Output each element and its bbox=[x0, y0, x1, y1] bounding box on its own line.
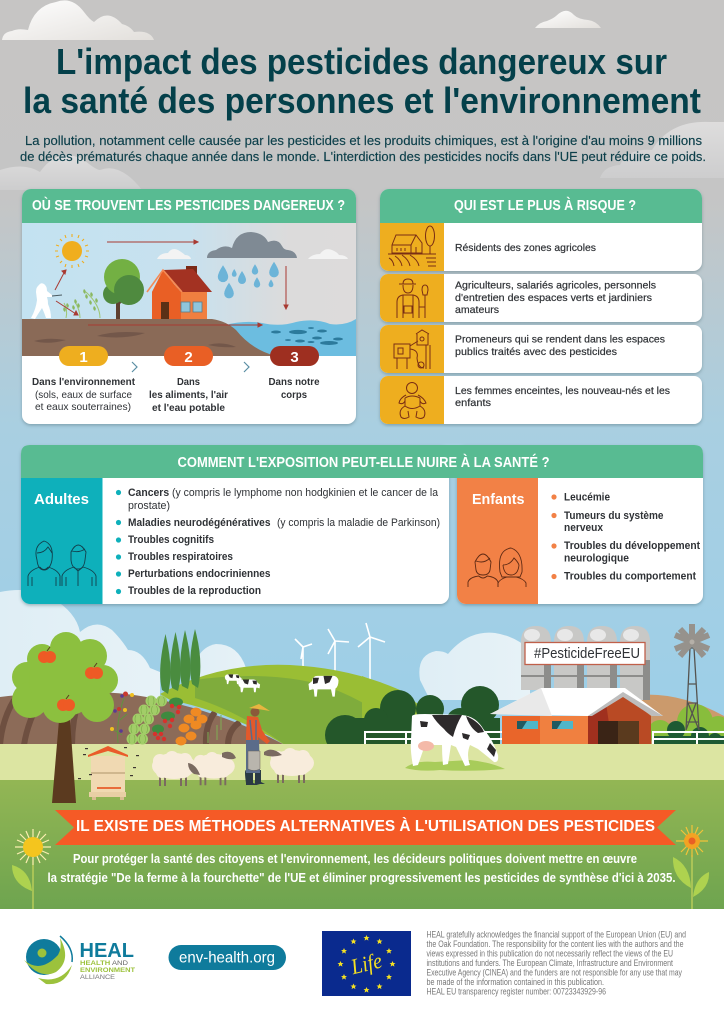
step 3 text: corps bbox=[281, 389, 307, 401]
footer bbox=[0, 909, 724, 1024]
cream band bbox=[0, 744, 724, 780]
children list: Leucémie bbox=[564, 492, 610, 504]
step 2 badge: 2 bbox=[184, 349, 193, 366]
step 2 text: et l'eau potable bbox=[152, 402, 225, 414]
icon: fish bbox=[271, 327, 343, 345]
wind turbines bbox=[295, 623, 385, 680]
bushes bbox=[325, 686, 500, 755]
cypress trees bbox=[160, 629, 200, 694]
logo: HEAL: HEAL bbox=[80, 940, 134, 962]
icon: children bbox=[468, 548, 526, 587]
grass bbox=[0, 780, 724, 909]
silos bbox=[521, 626, 650, 700]
risk row 2: farmers: Agriculteurs, salariés agricoles, personnels bbox=[455, 280, 656, 292]
icon: adults bbox=[28, 541, 96, 586]
icon: house bbox=[147, 266, 212, 319]
adults list bbox=[116, 487, 440, 597]
windmill bbox=[675, 624, 709, 730]
call to action text: Pour protéger la santé des citoyens et l'environnement, les décideurs politiques doivent mettre en œuvre bbox=[73, 851, 637, 866]
arrow: step chevron 1 bbox=[132, 362, 137, 372]
health panel header bbox=[21, 445, 703, 478]
risk row 1: residents: Résidents des zones agricoles bbox=[455, 242, 596, 254]
panel: où se trouvent les pesticides bbox=[22, 189, 356, 424]
bees bbox=[78, 747, 139, 779]
panel heading: QUI EST LE PLUS À RISQUE ? bbox=[454, 197, 636, 214]
panel: qui est le plus à risque bbox=[380, 189, 702, 424]
background clouds bbox=[0, 0, 724, 190]
call to action text bbox=[48, 851, 676, 885]
children list: neurologique bbox=[564, 553, 629, 565]
beehive bbox=[88, 746, 128, 800]
adults list: Cancers (y compris le lymphome non hodgkinien et le cancer de la bbox=[128, 487, 439, 499]
farmer bbox=[245, 704, 270, 785]
icon: orange flower bbox=[673, 825, 709, 909]
icon: farmer bbox=[397, 279, 428, 318]
step 1 text: et eaux souterraines) bbox=[35, 401, 131, 413]
logo: EU Life: Life bbox=[347, 947, 385, 979]
logo: HEAL: HEALTH AND bbox=[80, 960, 128, 967]
icon: playground bbox=[394, 330, 430, 369]
icon: tree bbox=[103, 259, 144, 319]
risk row 4: children bbox=[380, 376, 702, 424]
apple tree bbox=[12, 632, 118, 803]
funding disclaimer: be made of the information contained in this publication. bbox=[426, 977, 604, 987]
panel: comment l'exposition peut-elle nuire à la santé bbox=[21, 445, 703, 604]
landscape background clouds bbox=[0, 590, 530, 720]
children card: Enfants bbox=[472, 491, 524, 508]
step 1 badge bbox=[59, 346, 108, 366]
risk row 3: walkers: Promeneurs qui se rendent dans les espaces bbox=[455, 334, 665, 346]
logo: HEAL bbox=[24, 936, 136, 984]
risk row 2: farmers: amateurs bbox=[455, 304, 499, 316]
children list: nerveux bbox=[564, 522, 604, 534]
banner: IL EXISTE DES MÉTHODES ALTERNATIVES À L'UTILISATION DES PESTICIDES bbox=[76, 816, 655, 835]
step 2 text: les aliments, l'air bbox=[149, 389, 228, 401]
risk row 2: farmers bbox=[380, 274, 702, 322]
water bbox=[225, 319, 356, 356]
adults list: Maladies neurodégénératives bbox=[128, 517, 270, 529]
icon: person spraying bbox=[31, 283, 62, 319]
background sky bbox=[0, 0, 724, 760]
risk row 2: farmers: d'entretien des espaces verts et jardiniers bbox=[455, 292, 652, 304]
step 3 badge: 3 bbox=[290, 349, 299, 366]
icon: white clouds bbox=[157, 249, 348, 259]
children list: Tumeurs du système bbox=[564, 510, 664, 522]
children card bbox=[457, 445, 703, 604]
sign: hashtag: #PesticideFreeEU bbox=[534, 646, 640, 662]
panel heading: OÙ SE TROUVENT LES PESTICIDES DANGEREUX ? bbox=[32, 196, 345, 214]
step 3 badge bbox=[270, 346, 319, 366]
icon: yellow flower bbox=[12, 829, 51, 909]
intro text: de décès prématurés chaque année dans le monde. L'interdiction des pesticides nocifs dans l'UE peut réduire ce poids. bbox=[20, 150, 706, 164]
logo: EU Life bbox=[322, 931, 411, 996]
adults list: Troubles de la reproduction bbox=[128, 585, 261, 597]
right tan hill bbox=[640, 695, 724, 745]
step 2 badge bbox=[164, 346, 213, 366]
risk row 4: children: Les femmes enceintes, les nouveau-nés et les bbox=[455, 385, 670, 397]
adults list: prostate) bbox=[128, 500, 170, 512]
panel illustration: pesticide cycle bbox=[22, 222, 356, 356]
big cow bbox=[405, 714, 505, 771]
title: L'impact des pesticides dangereux sur bbox=[56, 41, 667, 82]
adults list: (y compris la maladie de Parkinson) bbox=[277, 517, 440, 529]
step 2 text bbox=[149, 376, 228, 414]
banner bbox=[55, 810, 676, 845]
sign: hashtag bbox=[525, 642, 645, 664]
icon: rain cloud bbox=[207, 232, 297, 258]
right bushes bbox=[648, 704, 724, 747]
intro text: La pollution, notamment celle causée par les pesticides et les produits chimiques, est à l'origine d'au moins 9 millions bbox=[25, 134, 702, 148]
step 2 text: Dans bbox=[177, 376, 200, 388]
risk row 1: residents bbox=[380, 189, 702, 271]
children list: Troubles du comportement bbox=[564, 571, 696, 583]
logo: HEAL: ENVIRONMENT bbox=[80, 967, 136, 974]
sheep bbox=[152, 748, 314, 786]
icon: sun bbox=[55, 234, 89, 268]
small cows on the hill bbox=[225, 674, 338, 697]
brown field hill bbox=[0, 692, 285, 745]
adults card: Adultes bbox=[34, 491, 89, 508]
adults list: Perturbations endocriniennes bbox=[128, 568, 270, 580]
arrow: step chevron 2 bbox=[244, 362, 249, 372]
website pill bbox=[168, 945, 286, 970]
ground bbox=[22, 319, 276, 356]
step 1 text: (sols, eaux de surface bbox=[35, 389, 132, 401]
children list: Troubles du développement bbox=[564, 540, 700, 552]
arrows: pesticide flows bbox=[55, 240, 288, 327]
landscape scene bbox=[0, 623, 724, 909]
icon: rain drops bbox=[218, 262, 279, 298]
adults card bbox=[21, 445, 449, 604]
green hills bbox=[160, 665, 470, 745]
icon: plants bbox=[63, 289, 100, 318]
children list bbox=[551, 492, 700, 583]
step 3 text bbox=[268, 376, 320, 401]
logo: HEAL: ALLIANCE bbox=[80, 974, 115, 981]
step 1 text: Dans l'environnement bbox=[32, 376, 135, 388]
website pill: env-health.org bbox=[179, 950, 275, 966]
icon: baby bbox=[399, 382, 426, 418]
risk row 3: walkers: publics traités avec des pesticides bbox=[455, 346, 617, 358]
intro text bbox=[20, 134, 706, 164]
step 1 badge: 1 bbox=[79, 349, 88, 366]
barn bbox=[490, 688, 663, 744]
adults list: Troubles cognitifs bbox=[128, 534, 214, 546]
risk row 3: walkers bbox=[380, 325, 702, 373]
icon: farm bbox=[388, 226, 436, 266]
vegetable plots bbox=[110, 692, 221, 746]
panel heading: COMMENT L'EXPOSITION PEUT-ELLE NUIRE À LA SANTÉ ? bbox=[178, 454, 550, 471]
step 3 text: Dans notre bbox=[268, 376, 320, 388]
step 1 text bbox=[32, 376, 135, 413]
fences bbox=[364, 731, 724, 744]
risk row 4: children: enfants bbox=[455, 397, 491, 409]
adults list: Troubles respiratoires bbox=[128, 551, 233, 563]
funding disclaimer: HEAL EU transparency register number: 00723343929-96 bbox=[426, 987, 606, 997]
title bbox=[23, 41, 701, 121]
funding disclaimer bbox=[426, 929, 686, 997]
